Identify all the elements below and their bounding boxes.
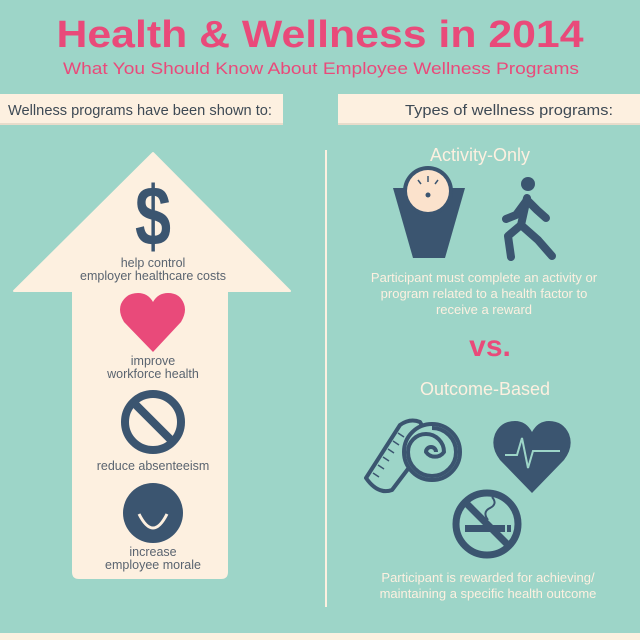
icon: no sign — [125, 394, 181, 450]
left header bar — [0, 94, 283, 125]
icon: scale — [393, 166, 465, 258]
text: activity description: program related to a health factor to — [381, 286, 587, 301]
icon: tape measure — [366, 421, 460, 491]
icon: smile — [123, 483, 183, 543]
left header bar: Wellness programs have been shown to: — [8, 102, 272, 119]
title: Health & Wellness in 2014 — [56, 14, 584, 56]
right header bar: Types of wellness programs: — [405, 102, 613, 119]
icon: walking person — [506, 177, 552, 257]
text: health: improve — [131, 354, 175, 368]
text: outcome description — [380, 570, 596, 601]
panel: benefits arrow: workforce health — [106, 367, 199, 381]
text: activity description: Participant must complete an activity or — [371, 270, 598, 285]
panel: benefits arrow — [14, 153, 290, 578]
icon: heartbeat heart — [493, 421, 571, 493]
text: outcome description: maintaining a specific health outcome — [380, 586, 596, 601]
panel: benefits arrow: employee morale — [105, 558, 201, 572]
icon: dollar: $ — [135, 169, 171, 263]
text: activity description: receive a reward — [436, 302, 532, 317]
subtitle: What You Should Know About Employee Wellness Programs — [63, 59, 579, 78]
text: costs: help control — [121, 256, 185, 270]
heading: activity-only: Activity-Only — [430, 145, 530, 165]
icon: pink heart — [120, 293, 185, 352]
text: morale: increase — [129, 545, 177, 559]
panel: benefits arrow: employer healthcare costs — [80, 269, 226, 283]
right header bar — [338, 94, 640, 125]
text: outcome description: Participant is rewarded for achieving/ — [381, 570, 595, 585]
heading: outcome-based: Outcome-Based — [420, 379, 550, 399]
vs: vs. — [469, 330, 511, 363]
text: activity description — [371, 270, 598, 317]
text: absenteeism: reduce absenteeism — [97, 459, 209, 473]
icon: no smoking — [456, 493, 518, 555]
